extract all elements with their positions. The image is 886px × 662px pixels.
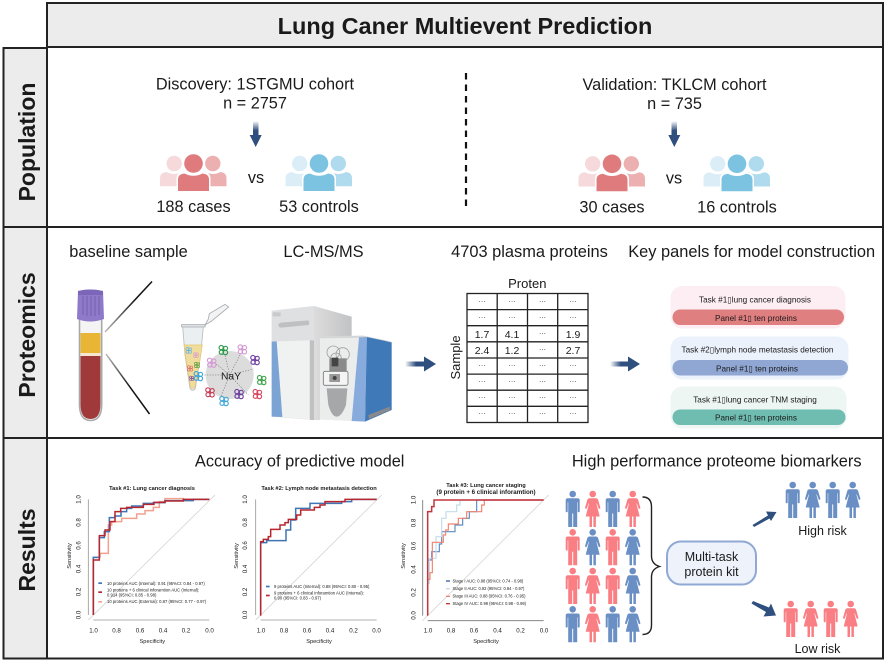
table: sample by protein: ···: [570, 298, 576, 306]
chart: ROC task 3: 0.2: [410, 588, 418, 597]
chart: ROC task 3: Stage I AUC: 0.88 (95%CI: 0.74 - 0.98): [452, 578, 524, 584]
chart: ROC task 2: 1.0: [242, 495, 249, 504]
chart: ROC task 3: 0.8: [447, 628, 456, 634]
discovery controls count: 53 controls: [279, 198, 359, 216]
validation sample size: n = 735: [647, 95, 702, 113]
panel: task 1: Task #1▯lung cancer diagnosis: [699, 296, 811, 305]
chart: ROC task 3: [401, 483, 549, 645]
table heading: Proten: [508, 276, 546, 291]
chart: ROC task 1: 10 proteins AUC (Internal): 0.91 (95%CI: 0.84 - 0.97): [107, 581, 205, 586]
chart: ROC task 3: 1.0: [424, 628, 433, 634]
panel: task 3: Panel #1▯ ten proteins: [715, 414, 797, 423]
icon: patient cohort: [566, 491, 640, 642]
chart: ROC task 1: 0.0: [76, 610, 82, 619]
chart: ROC task 3: 0.8: [410, 518, 418, 527]
heading: population: Population: [14, 83, 40, 201]
chart: ROC task 1: 0.4: [76, 564, 82, 573]
chart: ROC task 3: 0.4: [493, 628, 502, 634]
table: sample by protein: ···: [539, 394, 546, 402]
label: low risk: Low risk: [795, 642, 841, 656]
chart: ROC task 2: 0.6: [242, 541, 249, 550]
chart: ROC task 1: 0.4: [159, 628, 168, 634]
chart: ROC task 3: 0.6: [410, 541, 418, 550]
icon: validation controls: [704, 154, 770, 192]
chart title: Task #1: Lung cancer diagnosis: [109, 486, 195, 492]
chart: ROC task 2: 0.2: [349, 628, 358, 634]
heading: proteomics: Proteomics: [14, 272, 40, 398]
table: sample by protein: [448, 276, 588, 422]
vs label: vs: [666, 169, 682, 187]
table: sample by protein: ···: [570, 378, 576, 386]
step label: plasma proteins: 4703 plasma proteins: [451, 243, 608, 261]
validation cohort heading: Validation: TKLCM cohort: [582, 76, 767, 94]
chart: ROC task 2: [234, 486, 382, 645]
icon: blood tube: [77, 290, 104, 420]
chart: ROC task 1: 0.6: [136, 628, 145, 634]
chart: ROC task 1: 0.8: [112, 628, 121, 634]
table: sample by protein: 1.2: [505, 345, 519, 357]
divider: [465, 73, 467, 208]
panel: task 2: Task #2▯lymph node metastasis detection: [682, 346, 834, 355]
callout: multi-task protein kit: [667, 542, 756, 584]
table: sample by protein: ···: [570, 362, 576, 370]
table: sample by protein: ···: [478, 410, 486, 418]
panel: population: [4, 47, 883, 227]
chart: ROC task 3: Sensitivity: [401, 543, 407, 569]
chart: ROC task 3: Stage II AUC: 0.92 (95%CI: 0.84 - 0.97): [452, 586, 525, 591]
chart: ROC task 3: Stage IV AUC: 0.99 (95%CI: 0.98 - 0.99): [452, 601, 527, 606]
chart: ROC task 2: 1.0: [257, 628, 266, 634]
panel: task 1: [670, 286, 846, 328]
chart: ROC task 2: 0.0: [372, 628, 381, 634]
table: sample by protein: 4.1: [505, 329, 519, 341]
chart: ROC task 2: 0.6: [303, 628, 312, 634]
table: sample by protein: ···: [539, 314, 546, 322]
table: sample by protein: ···: [508, 378, 516, 386]
panel: task 3: [670, 386, 846, 428]
table: sample by protein: ···: [478, 298, 486, 306]
zoom lines: [105, 282, 152, 414]
validation controls count: 16 controls: [697, 198, 777, 216]
chart: ROC task 3: Specificity: [473, 639, 499, 645]
panel: task 3: Task #1▯lung cancer TNM staging: [693, 396, 817, 405]
chart: ROC task 3: Stage III AUC: 0.88 (95%CI: 0.76 - 0.95): [452, 594, 526, 598]
panel: task 2: Panel #1▯ ten proteins: [716, 364, 798, 373]
chart: ROC task 1: 0.914 (95%CI: 0.85 - 0.98): [107, 592, 157, 598]
table: sample by protein: ···: [539, 362, 546, 370]
table side label: Sample: [448, 335, 463, 380]
panel: task 2: [670, 336, 848, 380]
validation cases count: 30 cases: [579, 198, 645, 216]
arrow: to panels: [610, 356, 640, 372]
arrow: to high risk: [752, 512, 776, 527]
icon: sample tube with NaY: NaY: [221, 372, 241, 383]
table: sample by protein: ···: [478, 378, 486, 386]
table: sample by protein: ···: [478, 394, 486, 402]
chart: ROC task 2: 9 proteins + 6 clinical inforamtion AUC (Internal):: [274, 590, 364, 596]
callout: multi-task protein kit: protein kit: [684, 565, 739, 579]
chart: ROC task 2: 0.90 (95%CI: 0.83 - 0.97): [274, 596, 322, 600]
label: high risk: High risk: [798, 524, 848, 538]
chart: ROC task 1: 0.6: [76, 541, 82, 550]
table: sample by protein: ···: [508, 298, 516, 306]
chart: ROC task 3: 0.4: [410, 565, 418, 574]
chart: ROC task 2: 0.8: [280, 628, 289, 634]
chart: ROC task 1: 0.2: [76, 587, 82, 596]
chart: ROC task 2: 0.8: [242, 518, 249, 527]
table: sample by protein: 1.7: [475, 329, 489, 341]
discovery sample size: n = 2757: [223, 94, 287, 112]
arrow: discovery down: [250, 121, 262, 147]
icon: discovery controls: [286, 153, 352, 192]
table: sample by protein: ···: [539, 298, 546, 306]
chart: ROC task 2: Specificity: [306, 639, 332, 645]
chart: ROC task 3: 1.0: [410, 495, 418, 504]
table: sample by protein: ···: [508, 362, 516, 370]
chart: ROC task 1: 0.0: [205, 628, 214, 634]
chart: ROC task 1: Sensitivity: [67, 543, 73, 569]
table: sample by protein: ···: [478, 362, 486, 370]
chart: ROC task 1: 0.2: [182, 628, 191, 634]
chart: ROC task 1: Specificity: [139, 639, 165, 645]
panel: proteomics: [4, 227, 883, 438]
vs label: vs: [248, 169, 264, 187]
chart: ROC task 1: 1.0: [76, 495, 82, 504]
chart: ROC task 1: 10 proteins + 6 clinical inforamtion AUC (Internal):: [107, 588, 199, 592]
chart: ROC task 2: 0.4: [242, 564, 249, 573]
chart: ROC task 3: 0.2: [516, 628, 525, 634]
table: sample by protein: ···: [570, 314, 576, 322]
chart: ROC task 1: 10 proteins AUC (External): 0.87 (95%CI: 0.77 - 0.97): [107, 599, 207, 604]
table: sample by protein: ···: [508, 410, 516, 418]
table: sample by protein: ···: [570, 394, 576, 402]
arrow: to proteins: [405, 356, 436, 372]
chart subtitle: (9 protein + 6 clinical inforamtion): [436, 489, 536, 496]
chart: ROC task 3: 0.0: [540, 628, 549, 634]
subheading: biomarkers: High performance proteome biomarkers: [572, 452, 862, 470]
table: sample by protein: ···: [539, 346, 546, 354]
chart: ROC task 2: 0.4: [326, 628, 335, 634]
icon: mass spectrometer: [272, 306, 392, 422]
chart: ROC task 1: 0.8: [76, 518, 82, 527]
chart: ROC task 2: 0.2: [242, 587, 249, 596]
heading: results: Results: [14, 508, 40, 592]
chart: ROC task 3: 0.0: [410, 611, 418, 620]
chart: ROC task 1: 1.0: [89, 628, 98, 634]
table: sample by protein: ···: [539, 378, 546, 386]
chart: ROC task 2: 9 proteins AUC (Internal): 0.88 (95%CI: 0.80 - 0.95): [274, 584, 370, 589]
discovery cases count: 188 cases: [156, 198, 231, 216]
panel: results: [4, 438, 883, 658]
subheading: accuracy: Accuracy of predictive model: [195, 452, 404, 470]
arrow: validation down: [668, 121, 680, 147]
chart title: Task #2: Lymph node metastasis detection: [261, 486, 377, 492]
table: sample by protein: 2.4: [475, 345, 489, 357]
discovery cohort heading: Discovery: 1STGMU cohort: [156, 76, 355, 94]
icon: discovery cases: [160, 153, 226, 192]
brace: [642, 497, 660, 634]
step label: baseline sample: baseline sample: [69, 243, 188, 261]
callout: multi-task protein kit: Multi-task: [685, 550, 739, 564]
icon: high risk group: [786, 482, 860, 518]
table: sample by protein: 2.7: [566, 345, 580, 357]
icon: validation cases: [578, 154, 645, 192]
arrow: to low risk: [752, 601, 776, 616]
table: sample by protein: ···: [570, 410, 576, 418]
chart: ROC task 1: [67, 486, 215, 645]
table: sample by protein: ···: [508, 314, 516, 322]
step label: LC-MS/MS: LC-MS/MS: [283, 243, 364, 261]
table: sample by protein: ···: [539, 410, 546, 418]
icon: low risk group: [784, 601, 858, 637]
chart title: Task #3: Lung cancer staging: [446, 483, 526, 489]
panel: task 1: Panel #1▯ ten proteins: [715, 314, 797, 323]
title: Lung Caner Multievent Prediction: [278, 13, 652, 39]
table: sample by protein: ···: [478, 314, 486, 322]
icon: sample tube with NaY: [181, 304, 266, 406]
chart: ROC task 2: 0.0: [242, 610, 249, 619]
title: [47, 3, 883, 47]
chart: ROC task 2: Sensitivity: [234, 543, 240, 569]
table: sample by protein: ···: [539, 330, 546, 338]
step label: key panels: Key panels for model construction: [628, 243, 875, 261]
chart: ROC task 3: 0.6: [470, 628, 479, 634]
table: sample by protein: ···: [508, 394, 516, 402]
table: sample by protein: 1.9: [566, 329, 580, 341]
